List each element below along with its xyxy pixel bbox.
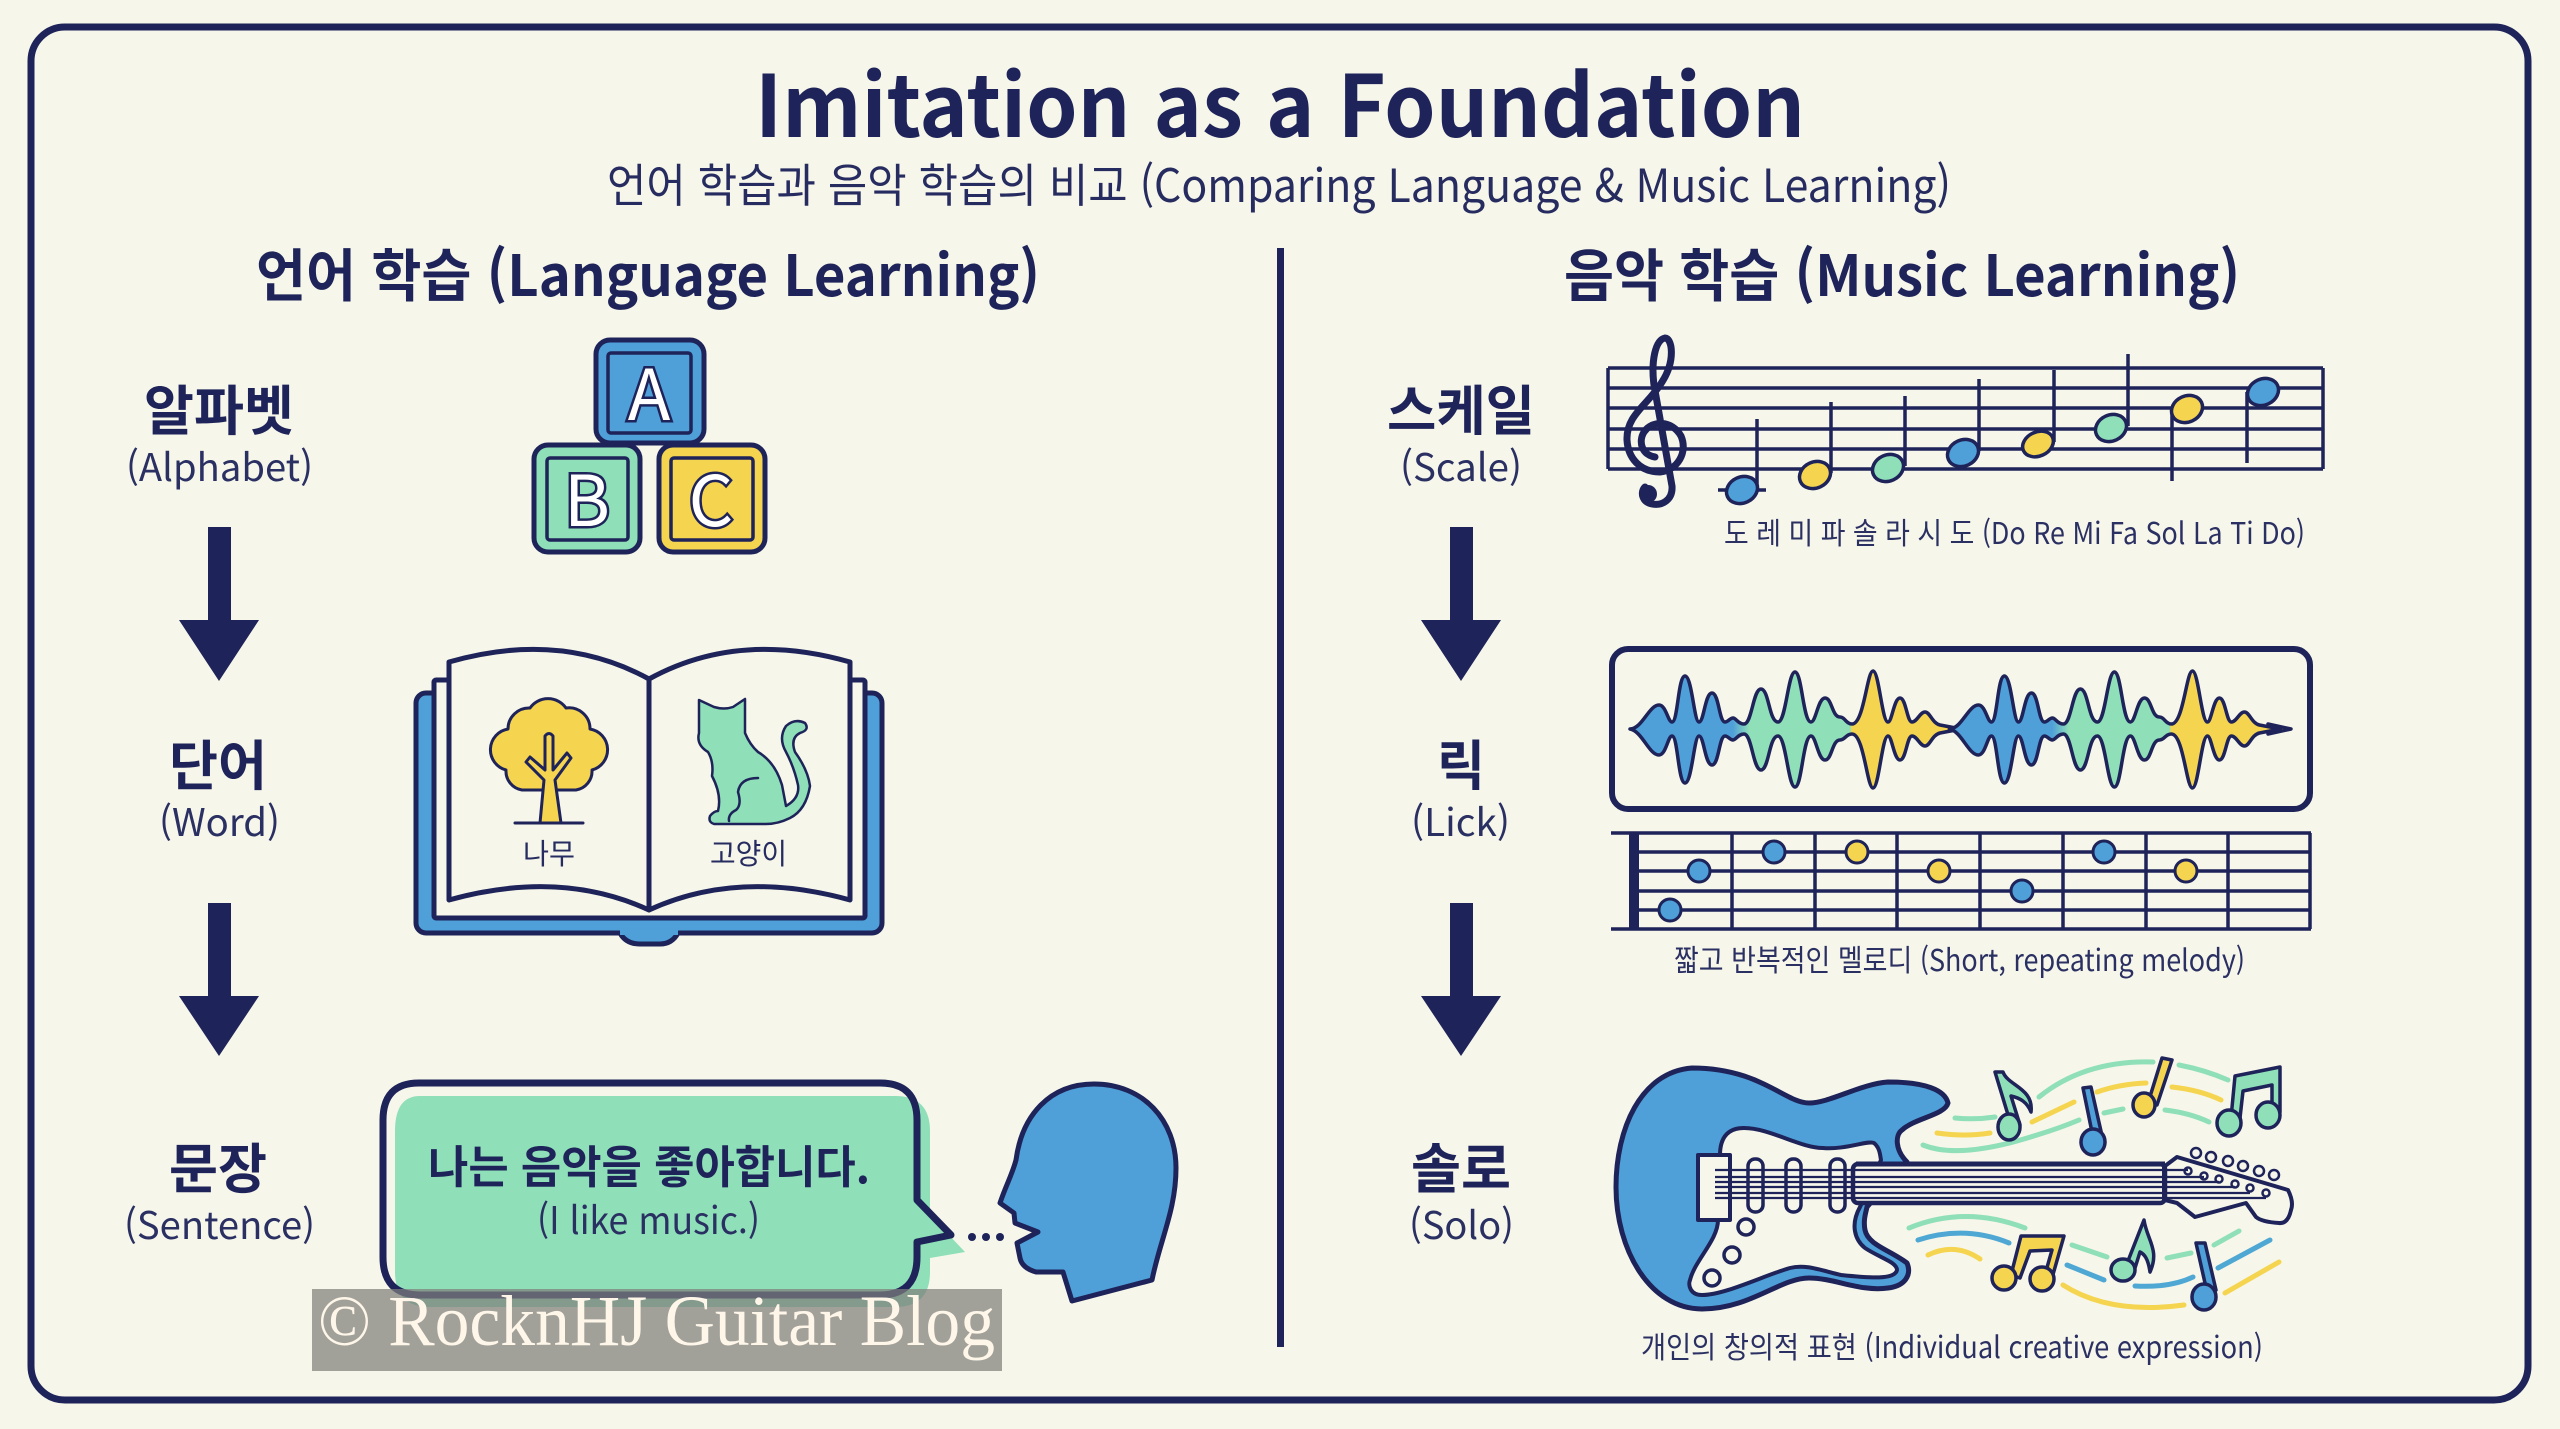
icon: cat <box>698 699 810 824</box>
bridge <box>1698 1155 1730 1220</box>
word label: cat: 고양이 <box>710 831 787 873</box>
label: scale <box>1387 367 1535 492</box>
pickups <box>1748 1159 1845 1212</box>
watermark: © RocknHJ Guitar Blog <box>318 1281 995 1361</box>
label: alphabet: 알파벳 <box>144 367 294 446</box>
label: sentence <box>124 1125 315 1250</box>
knobs <box>1704 1219 1754 1286</box>
label: alphabet <box>126 367 313 492</box>
heading: music learning: 음악 학습 (Music Learning) <box>1564 231 2240 313</box>
flowing sound lines <box>1909 1062 2279 1308</box>
icon: ABC blocks: B <box>564 446 610 547</box>
icon: open picture book <box>416 649 882 944</box>
label: lick: 릭 <box>1437 722 1485 801</box>
stems <box>1757 354 2247 488</box>
label: scale: 스케일 <box>1387 367 1535 446</box>
neck <box>1853 1164 2165 1203</box>
note: yellow beamed <box>1992 1236 2064 1291</box>
note heads <box>1722 373 2283 509</box>
caption: scale: 도 레 미 파 솔 라 시 도 (Do Re Mi Fa Sol La Ti Do) <box>1724 509 2305 553</box>
arrow: scale to lick <box>1421 527 1501 681</box>
label: lick <box>1411 722 1510 847</box>
label: alphabet: (Alphabet) <box>126 437 313 492</box>
sentence in Korean: 나는 음악을 좋아합니다. <box>428 1131 870 1196</box>
headstock <box>2165 1157 2292 1223</box>
icon: ABC blocks: C <box>689 446 733 547</box>
arrow: word to sentence <box>179 903 259 1056</box>
label: sentence: 문장 <box>169 1125 267 1204</box>
icon: treble clef <box>1627 338 1683 504</box>
waveform box <box>1612 649 2310 809</box>
title: Imitation as a Foundation <box>755 37 1805 162</box>
label: lick: (Lick) <box>1411 792 1510 847</box>
icon: speaking head <box>1000 1084 1176 1301</box>
tablature fretboard <box>1611 833 2311 929</box>
tuners <box>2184 1148 2279 1196</box>
ledger line <box>1718 488 1766 492</box>
note: green eighth upper <box>1995 1072 2031 1140</box>
speech dots <box>968 1233 1004 1241</box>
note: blue quarter upper <box>2081 1087 2105 1155</box>
subtitle: 언어 학습과 음악 학습의 비교 (Comparing Language & Music Learning) <box>607 150 1951 216</box>
heading: language learning: 언어 학습 (Language Learning) <box>256 231 1040 313</box>
label: solo: (Solo) <box>1409 1195 1514 1250</box>
icon: tree <box>490 699 608 823</box>
floating music notes <box>1992 1058 2280 1310</box>
sentence translation: (I like music.) <box>537 1190 760 1245</box>
strings <box>1715 1170 2266 1198</box>
label: scale: (Scale) <box>1400 437 1522 492</box>
icon: ABC blocks <box>534 340 765 552</box>
note: yellow quarter <box>2133 1058 2172 1117</box>
arrow: alphabet to word <box>179 527 259 681</box>
caption: solo: 개인의 창의적 표현 (Individual creative expression) <box>1641 1323 2263 1367</box>
arrow: lick to solo <box>1421 903 1501 1056</box>
center divider <box>1277 248 1284 1347</box>
note: blue quarter lower <box>2192 1243 2216 1310</box>
caption: lick: 짧고 반복적인 멜로디 (Short, repeating melody) <box>1674 936 2245 980</box>
label: solo <box>1409 1125 1514 1250</box>
icon: ABC blocks: A <box>628 340 671 441</box>
word label: tree: 나무 <box>523 831 575 873</box>
label: word: 단어 <box>169 722 267 801</box>
label: word <box>159 722 280 847</box>
electric guitar <box>1616 1068 2292 1309</box>
label: word: (Word) <box>159 792 280 847</box>
label: sentence: (Sentence) <box>124 1195 315 1250</box>
label: solo: 솔로 <box>1411 1125 1511 1204</box>
speech bubble <box>383 1083 965 1307</box>
note: green eighth lower <box>2111 1220 2154 1281</box>
note: green beamed <box>2217 1067 2280 1136</box>
music staff with scale notes <box>1608 338 2323 509</box>
